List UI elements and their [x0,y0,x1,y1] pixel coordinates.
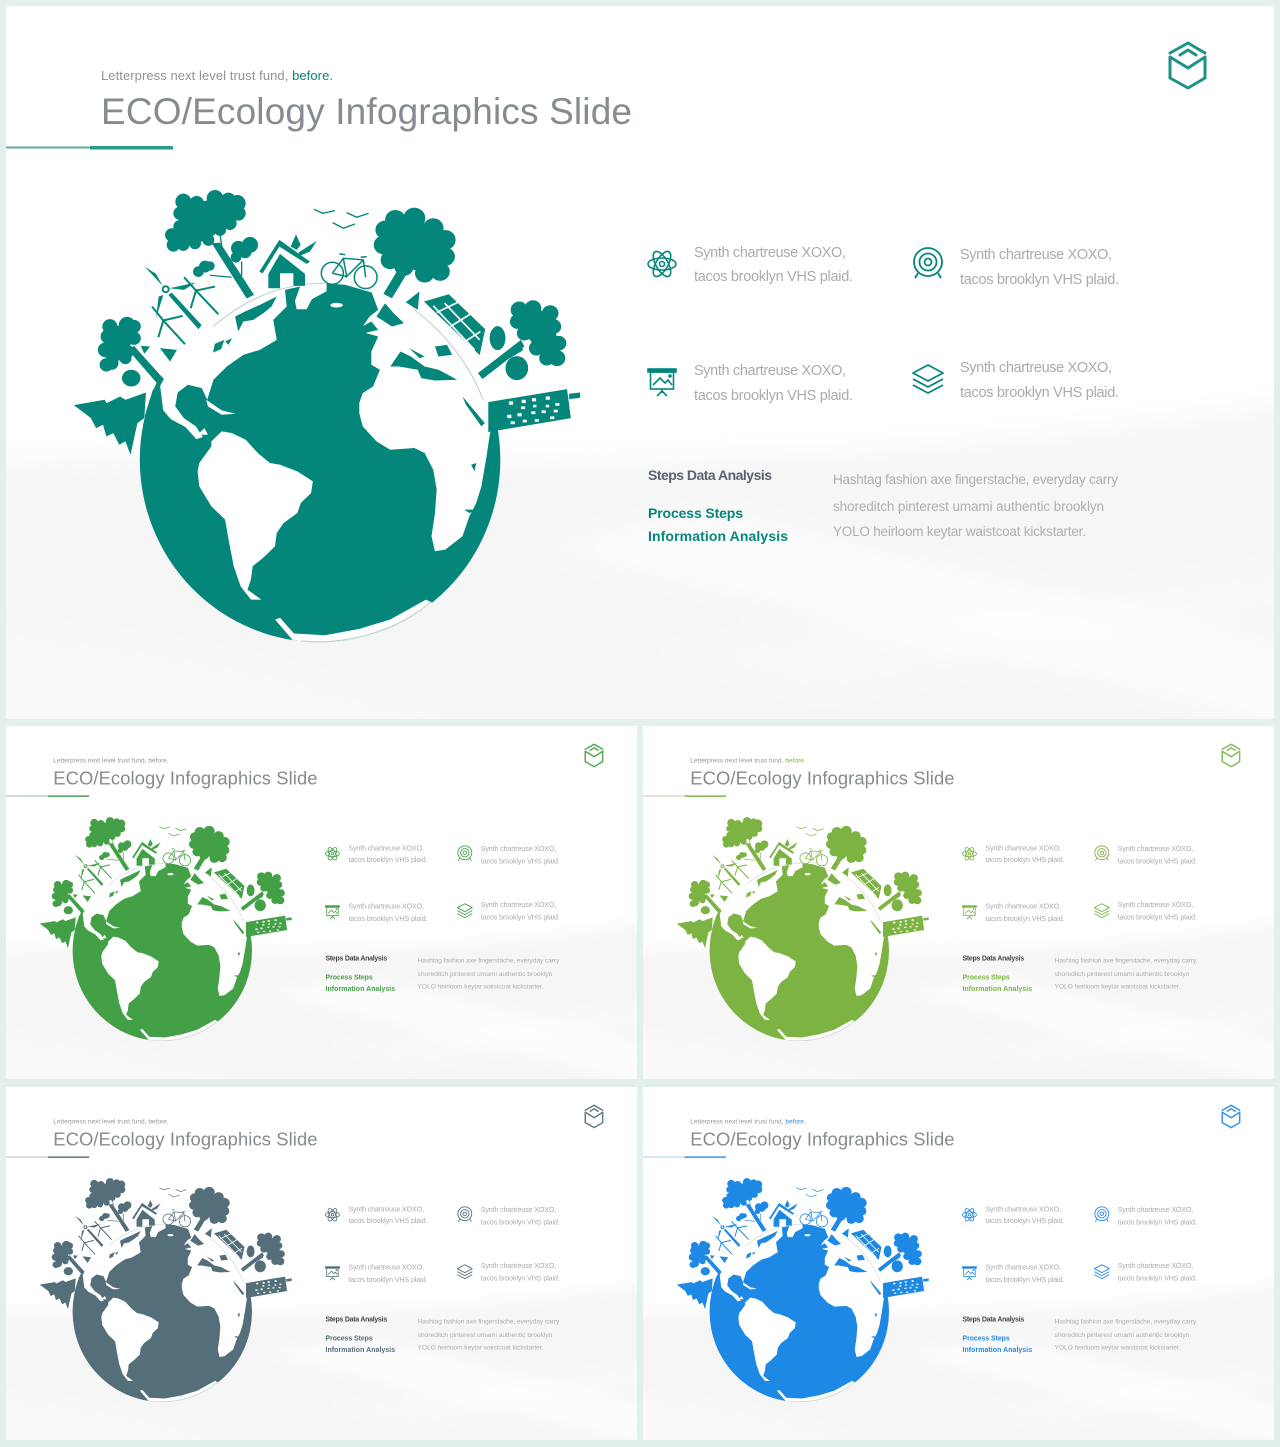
icon: atom [648,249,676,279]
icon: presentation [962,906,976,919]
heading: ECO/Ecology Infographics Slide [690,1128,955,1149]
feature text three: tacos brooklyn VHS plaid. [348,914,427,923]
heading underline accent [90,146,173,150]
paragraph: YOLO heirloom keytar waistcoat kickstarter. [1055,1344,1181,1351]
icon: atom [325,846,339,861]
heading underline [643,1156,685,1158]
steps heading: Steps Data Analysis [325,1317,387,1324]
paragraph: shoreditch pinterest umami authentic brooklyn [418,1332,553,1339]
icon: presentation [325,1267,339,1280]
paragraph: Hashtag fashion axe fingerstache, everyday carry [1055,1319,1197,1326]
icon: atom [962,1207,976,1222]
subtitle: Letterpress next level trust fund, before. [690,758,806,765]
logo icon [1170,43,1205,88]
paragraph: YOLO heirloom keytar waistcoat kickstarter. [418,1344,544,1351]
feature text four: tacos brooklyn VHS plaid. [481,1274,560,1283]
logo icon [1222,1105,1240,1128]
heading underline accent [685,1156,726,1158]
panel: green slide [6,726,637,1079]
globe illustration [40,817,292,1045]
icon: layers [913,365,943,393]
heading underline [643,795,685,797]
subtitle: Letterpress next level trust fund, before. [690,1119,806,1126]
heading underline [6,795,48,797]
paragraph: Hashtag fashion axe fingerstache, everyday carry [418,958,560,965]
globe illustration [677,817,929,1045]
heading: ECO/Ecology Infographics Slide [53,767,318,788]
heading: ECO/Ecology Infographics Slide [690,767,955,788]
process heading: Information Analysis [962,986,1032,993]
feature text three: Synth chartreuse XOXO, [985,1263,1061,1272]
feature text one: tacos brooklyn VHS plaid. [348,855,427,864]
heading: ECO/Ecology Infographics Slide [53,1128,318,1149]
steps heading: Steps Data Analysis [648,467,772,483]
paragraph: Hashtag fashion axe fingerstache, everyday carry [1055,958,1197,965]
feature text two: Synth chartreuse XOXO, [481,844,556,853]
feature text four: Synth chartreuse XOXO, [1118,1261,1193,1270]
feature text two: Synth chartreuse XOXO, [1118,844,1193,853]
feature text four: Synth chartreuse XOXO, [481,1261,556,1270]
feature text three: tacos brooklyn VHS plaid. [348,1275,427,1284]
feature text four: tacos brooklyn VHS plaid. [481,913,560,922]
feature text one: tacos brooklyn VHS plaid. [694,269,853,285]
feature text one: Synth chartreuse XOXO, [694,245,846,261]
icon: layers [457,904,472,918]
steps heading: Steps Data Analysis [325,956,387,963]
feature text two: tacos brooklyn VHS plaid. [1118,1218,1197,1227]
feature text two: Synth chartreuse XOXO, [1118,1205,1193,1214]
icon: presentation [325,906,339,919]
globe illustration [40,1178,292,1406]
feature text one: Synth chartreuse XOXO, [348,1204,424,1213]
feature text four: tacos brooklyn VHS plaid. [1118,1274,1197,1283]
paragraph: YOLO heirloom keytar waistcoat kickstarter. [418,983,544,990]
feature text one: tacos brooklyn VHS plaid. [985,1216,1064,1225]
icon: presentation [962,1267,976,1280]
feature text two: tacos brooklyn VHS plaid. [481,1218,560,1227]
icon: layers [1094,1265,1109,1279]
icon: atom [962,846,976,861]
panel: light green slide [643,726,1274,1079]
paragraph: Hashtag fashion axe fingerstache, everyday carry [833,472,1118,487]
feature text three: Synth chartreuse XOXO, [348,1263,424,1272]
icon: target [914,248,942,278]
process heading: Process Steps [962,1335,1010,1342]
panel: main teal slide [6,6,1274,719]
feature text two: tacos brooklyn VHS plaid. [1118,857,1197,866]
subtitle: Letterpress next level trust fund, before. [101,68,333,83]
icon: target [458,1207,472,1222]
panel: slate slide [6,1087,637,1440]
steps heading: Steps Data Analysis [962,956,1024,963]
paragraph: YOLO heirloom keytar waistcoat kickstarter. [833,524,1086,539]
feature text three: tacos brooklyn VHS plaid. [985,914,1064,923]
paragraph: YOLO heirloom keytar waistcoat kickstarter. [1055,983,1181,990]
process heading: Process Steps [325,1335,373,1342]
feature text four: tacos brooklyn VHS plaid. [1118,913,1197,922]
globe illustration [74,190,580,650]
heading underline accent [48,795,89,797]
process heading: Process Steps [962,974,1010,981]
logo icon [585,744,603,767]
icon: target [458,846,472,861]
globe illustration [677,1178,929,1406]
paragraph: shoreditch pinterest umami authentic brooklyn [1055,1332,1190,1339]
feature text one: tacos brooklyn VHS plaid. [985,855,1064,864]
feature text two: tacos brooklyn VHS plaid. [481,857,560,866]
feature text three: tacos brooklyn VHS plaid. [694,388,853,404]
icon: presentation [648,369,676,396]
heading underline [6,146,90,148]
process heading: Information Analysis [648,528,788,544]
feature text three: Synth chartreuse XOXO, [985,902,1061,911]
process heading: Process Steps [648,505,743,521]
icon: layers [1094,904,1109,918]
paragraph: shoreditch pinterest umami authentic brooklyn [1055,971,1190,978]
icon: layers [457,1265,472,1279]
feature text three: Synth chartreuse XOXO, [348,902,424,911]
feature text one: Synth chartreuse XOXO, [348,843,424,852]
feature text four: Synth chartreuse XOXO, [481,900,556,909]
feature text one: Synth chartreuse XOXO, [985,1204,1061,1213]
logo icon [1222,744,1240,767]
feature text two: Synth chartreuse XOXO, [960,247,1112,263]
subtitle: Letterpress next level trust fund, before. [53,758,169,765]
icon: target [1095,846,1109,861]
feature text four: Synth chartreuse XOXO, [960,360,1112,376]
paragraph: shoreditch pinterest umami authentic brooklyn [833,499,1104,514]
heading underline accent [685,795,726,797]
panel: blue slide [643,1087,1274,1440]
process heading: Process Steps [325,974,373,981]
icon: atom [325,1207,339,1222]
feature text two: tacos brooklyn VHS plaid. [960,272,1119,288]
feature text four: Synth chartreuse XOXO, [1118,900,1193,909]
paragraph: shoreditch pinterest umami authentic brooklyn [418,971,553,978]
heading underline accent [48,1156,89,1158]
process heading: Information Analysis [325,986,395,993]
steps heading: Steps Data Analysis [962,1317,1024,1324]
feature text three: tacos brooklyn VHS plaid. [985,1275,1064,1284]
feature text three: Synth chartreuse XOXO, [694,363,846,379]
feature text four: tacos brooklyn VHS plaid. [960,385,1119,401]
subtitle: Letterpress next level trust fund, before. [53,1119,169,1126]
paragraph: Hashtag fashion axe fingerstache, everyday carry [418,1319,560,1326]
feature text one: Synth chartreuse XOXO, [985,843,1061,852]
logo icon [585,1105,603,1128]
feature text one: tacos brooklyn VHS plaid. [348,1216,427,1225]
process heading: Information Analysis [325,1347,395,1354]
icon: target [1095,1207,1109,1222]
feature text two: Synth chartreuse XOXO, [481,1205,556,1214]
heading: ECO/Ecology Infographics Slide [101,91,632,132]
heading underline [6,1156,48,1158]
process heading: Information Analysis [962,1347,1032,1354]
